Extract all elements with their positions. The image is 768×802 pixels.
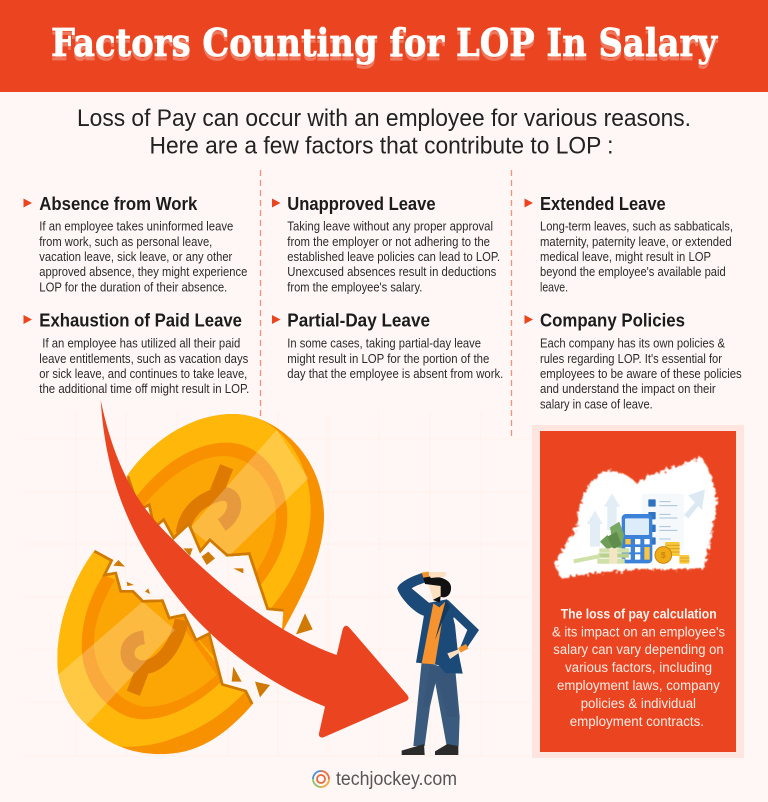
factor: Unapproved Leave: Taking leave without any proper approval bbox=[287, 220, 493, 234]
factor: Partial-Day Leave: In some cases, taking partial-day leave bbox=[287, 337, 481, 351]
factor: Absence from Work: If an employee takes uninformed leave bbox=[39, 220, 233, 234]
factor: Partial-Day Leave bbox=[272, 311, 503, 381]
factor: Company Policies: Company Policies bbox=[540, 311, 685, 331]
factor: Unapproved Leave: from the employer or not adhering to the bbox=[287, 235, 490, 249]
intro text: Here are a few factors that contribute to LOP : bbox=[150, 132, 614, 160]
factor: Partial-Day Leave: day that the employee is absent from work. bbox=[287, 367, 503, 381]
panel text: The loss of pay calculation bbox=[561, 606, 717, 621]
factor: Extended Leave: Extended Leave bbox=[540, 194, 666, 214]
factor: Unapproved Leave: from the employee's salary. bbox=[287, 280, 422, 294]
factor: Absence from Work: Absence from Work bbox=[39, 194, 198, 214]
panel text: various factors, including bbox=[565, 660, 712, 675]
factor: Unapproved Leave: Unapproved Leave bbox=[287, 194, 436, 214]
icon: bullet triangle bbox=[272, 198, 280, 208]
factor: Extended Leave: Long-term leaves, such as sabbaticals, bbox=[540, 220, 733, 234]
factor: Company Policies: and understand the impact on their bbox=[540, 382, 716, 396]
panel text: policies & individual bbox=[581, 696, 696, 711]
factor: Partial-Day Leave: might result in LOP for the portion of the bbox=[287, 352, 489, 366]
factor: Extended Leave: maternity, paternity leave, or extended bbox=[540, 235, 732, 249]
intro text bbox=[77, 105, 691, 160]
factor: Company Policies: salary in case of leave. bbox=[540, 397, 653, 411]
factor: Unapproved Leave: Unexcused absences result in deductions bbox=[287, 265, 496, 279]
panel text: salary can vary depending on bbox=[553, 642, 724, 657]
intro text: Loss of Pay can occur with an employee for various reasons. bbox=[77, 105, 691, 132]
factor: Exhaustion of Paid Leave: the additional time off might result in LOP. bbox=[39, 382, 249, 396]
factor: Unapproved Leave bbox=[272, 194, 500, 294]
logo: techjockey: techjockey.com bbox=[336, 769, 457, 790]
panel text bbox=[552, 606, 725, 729]
icon: bullet triangle bbox=[524, 315, 533, 324]
factor: Exhaustion of Paid Leave: If an employee has utilized all their paid bbox=[42, 337, 240, 351]
factor: Exhaustion of Paid Leave bbox=[24, 311, 249, 396]
factor: Company Policies: employees to be aware of these policies bbox=[540, 367, 742, 381]
factor: Absence from Work: from work, such as personal leave, bbox=[39, 235, 212, 249]
factor: Company Policies bbox=[524, 311, 742, 411]
factor: Company Policies: rules regarding LOP. It's essential for bbox=[540, 352, 722, 366]
factor: Partial-Day Leave: Partial-Day Leave bbox=[287, 311, 430, 331]
coin: upper half bbox=[120, 410, 327, 637]
coin: lower half bbox=[53, 547, 260, 760]
factor: Extended Leave bbox=[524, 194, 733, 294]
factor: Extended Leave: leave. bbox=[540, 280, 568, 294]
factor: Exhaustion of Paid Leave: Exhaustion of Paid Leave bbox=[39, 311, 242, 331]
illustration: calculator and money bbox=[555, 458, 716, 577]
icon: bullet triangle bbox=[524, 198, 533, 208]
panel text: & its impact on an employee's bbox=[552, 624, 725, 639]
factor: Unapproved Leave: established leave policies can lead to LOP. bbox=[287, 250, 500, 264]
icon: bullet triangle bbox=[24, 315, 32, 324]
panel text: employment laws, company bbox=[557, 678, 720, 693]
illustration: broken coin and falling arrow bbox=[53, 400, 409, 760]
arrow: falling bbox=[101, 400, 409, 737]
icon: techjockey rings bbox=[313, 771, 329, 787]
factor: Exhaustion of Paid Leave: or sick leave, and continues to take leave, bbox=[39, 367, 247, 381]
factor: Absence from Work: vacation leave, sick leave, or any other bbox=[39, 250, 232, 264]
factor: Company Policies: Each company has its own policies & bbox=[540, 337, 726, 351]
coin fragments bbox=[113, 548, 313, 697]
factor: Absence from Work: approved absence, they might experience bbox=[39, 265, 247, 279]
factor: Absence from Work bbox=[24, 194, 247, 294]
factor: Absence from Work: LOP for the duration of their absence. bbox=[39, 280, 227, 294]
icon: bullet triangle bbox=[24, 198, 32, 208]
factor: Exhaustion of Paid Leave: leave entitlements, such as vacation days bbox=[39, 352, 248, 366]
panel text: employment contracts. bbox=[570, 714, 704, 729]
header banner bbox=[0, 0, 768, 92]
panel: loss of pay calculation bbox=[532, 425, 744, 758]
illustration: confused man bbox=[397, 572, 479, 755]
illustration: calculator and money: $ bbox=[661, 550, 666, 560]
factor: Extended Leave: beyond the employee's available paid bbox=[540, 265, 726, 279]
factor: Extended Leave: medical leave, might result in LOP bbox=[540, 250, 711, 264]
icon: bullet triangle bbox=[272, 315, 280, 324]
